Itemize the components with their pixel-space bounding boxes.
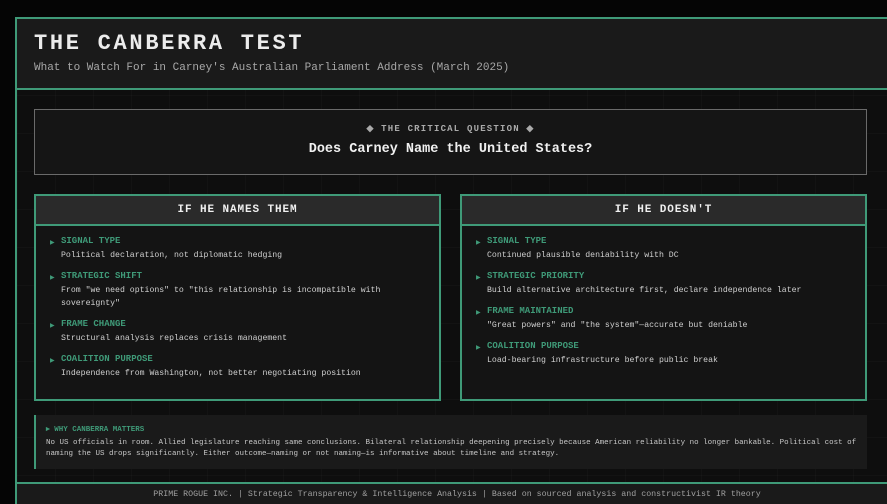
item: coalition purpose: ▶ bbox=[476, 344, 481, 351]
item: strategic priority bbox=[476, 271, 801, 294]
item: coalition purpose: ▶ bbox=[50, 357, 55, 364]
panel: if he doesn't: IF HE DOESN'T bbox=[615, 204, 712, 216]
item: signal type: ▶ bbox=[476, 239, 481, 246]
item: signal type: Continued plausible deniability with DC bbox=[487, 250, 679, 260]
item: signal type bbox=[50, 236, 282, 260]
item: strategic shift bbox=[50, 271, 380, 308]
item: coalition purpose bbox=[476, 341, 718, 364]
item: strategic shift: ▶ bbox=[50, 274, 55, 281]
item: signal type: ▶ bbox=[50, 239, 55, 246]
item: strategic priority: Build alternative architecture first, declare independence later bbox=[487, 286, 801, 294]
item: coalition purpose: Independence from Washington, not better negotiating position bbox=[61, 368, 361, 378]
callout: why canberra matters bbox=[34, 415, 867, 469]
critical question box: ◆ THE CRITICAL QUESTION ◆ bbox=[366, 124, 535, 134]
item: frame change: Structural analysis replaces crisis management bbox=[61, 334, 287, 342]
header bbox=[17, 19, 887, 90]
item: frame change bbox=[50, 319, 287, 342]
item: coalition purpose: COALITION PURPOSE bbox=[61, 354, 153, 364]
item: coalition purpose: Load-bearing infrastructure before public break bbox=[487, 356, 718, 364]
footer: PRIME ROGUE INC. | Strategic Transparency & Intelligence Analysis | Based on sourced analysis and constructivist IR theory bbox=[153, 490, 761, 499]
item: frame change: ▶ bbox=[50, 322, 55, 329]
callout: why canberra matters: ▸ WHY CANBERRA MATTERS bbox=[46, 426, 144, 434]
subtitle: What to Watch For in Carney's Australian Parliament Address (March 2025) bbox=[34, 62, 509, 74]
item: signal type: SIGNAL TYPE bbox=[61, 236, 120, 246]
footer bbox=[17, 482, 887, 504]
item: strategic shift: STRATEGIC SHIFT bbox=[61, 271, 142, 281]
critical question box: Does Carney Name the United States? bbox=[309, 142, 592, 157]
panel: if he names them bbox=[34, 194, 441, 401]
title: THE CANBERRA TEST bbox=[34, 31, 304, 56]
item: frame maintained: ▶ bbox=[476, 309, 481, 316]
item: strategic priority: ▶ bbox=[476, 274, 481, 281]
critical question box bbox=[34, 109, 867, 175]
item: frame change: FRAME CHANGE bbox=[61, 319, 126, 329]
item: signal type: SIGNAL TYPE bbox=[487, 236, 546, 246]
item: coalition purpose: COALITION PURPOSE bbox=[487, 341, 579, 351]
item: signal type: Political declaration, not diplomatic hedging bbox=[61, 250, 282, 260]
callout: why canberra matters: No US officials in room. Allied legislature reaching same conclusions. Bilateral relationship deepening precisely because American reliability no longer bankable. Political cost of naming the US drops significantly. Either outcome—naming or not naming—is informative about timeline and strategy. bbox=[46, 439, 856, 458]
panel: if he names them: IF HE NAMES THEM bbox=[177, 204, 298, 216]
item: frame maintained bbox=[476, 306, 747, 330]
item: strategic shift: From "we need options" to "this relationship is incompatible with sovereignty" bbox=[61, 286, 380, 308]
item: strategic priority: STRATEGIC PRIORITY bbox=[487, 271, 584, 281]
item: signal type bbox=[476, 236, 679, 260]
item: coalition purpose bbox=[50, 354, 361, 378]
panel: if he doesn't bbox=[460, 194, 867, 401]
item: frame maintained: "Great powers" and "the system"—accurate but deniable bbox=[487, 320, 747, 330]
item: frame maintained: FRAME MAINTAINED bbox=[487, 306, 573, 316]
